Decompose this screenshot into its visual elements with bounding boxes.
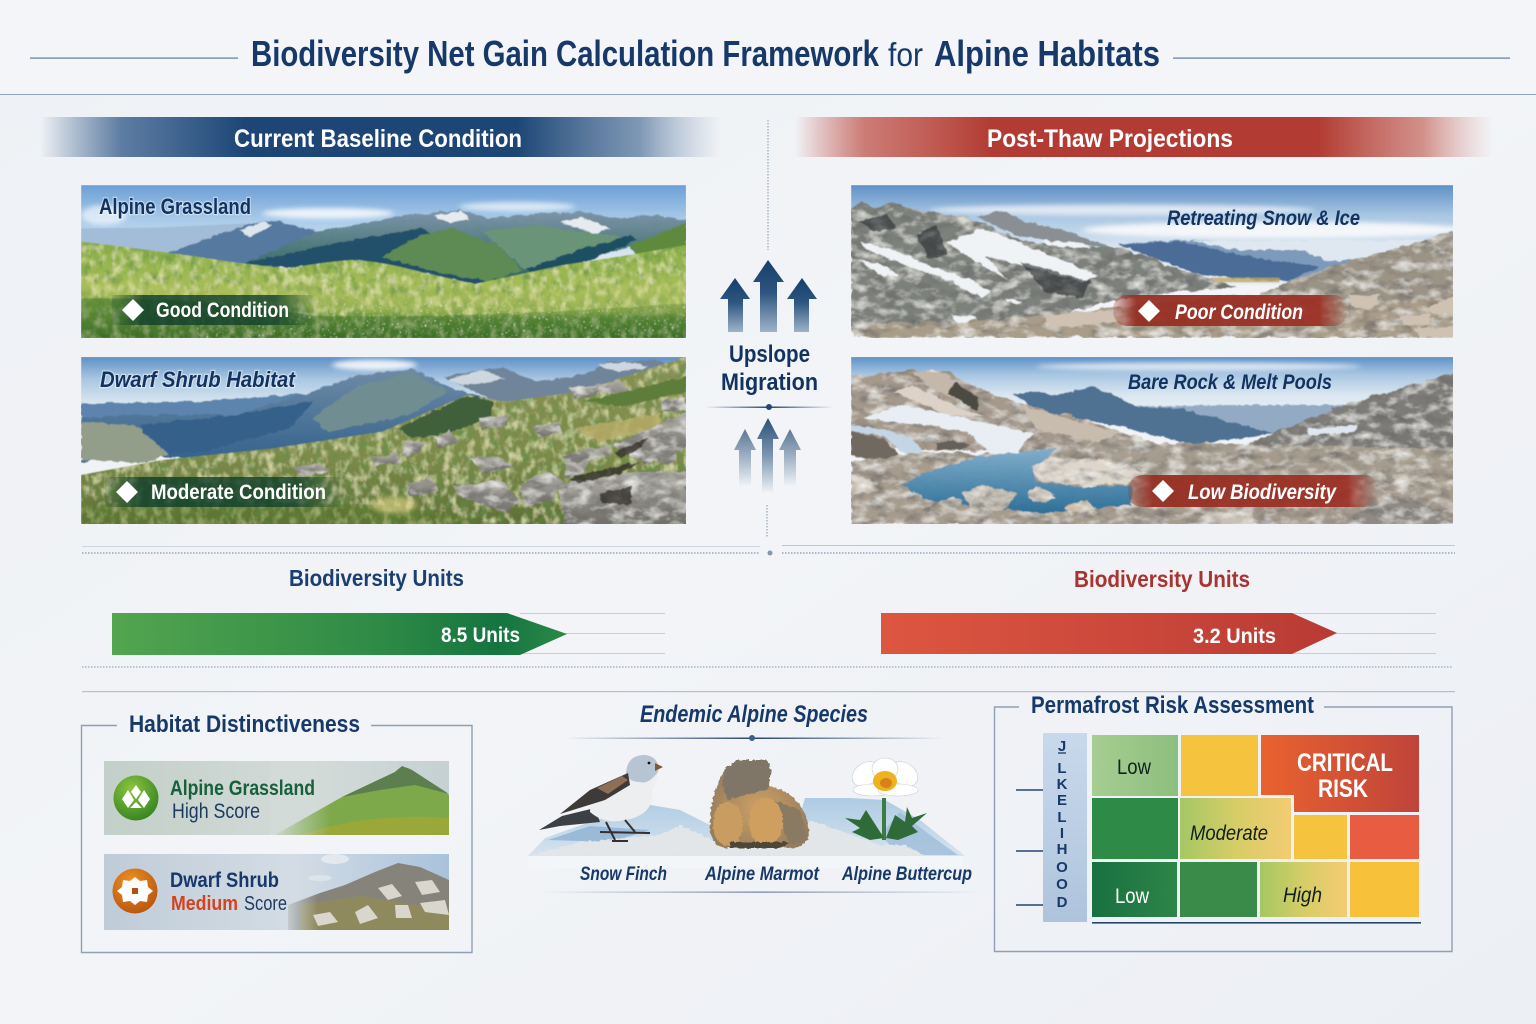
photo panel: alpine grassland <box>81 185 686 338</box>
label: Dwarf Shrub Habitat: Dwarf Shrub Habitat <box>100 367 297 392</box>
title bar <box>0 0 1536 95</box>
axis: likelihood: H <box>1057 841 1067 858</box>
photo panel: bare rock and melt pools <box>851 357 1456 525</box>
axis: likelihood: L <box>1057 760 1067 777</box>
risk matrix: Low <box>1115 885 1150 908</box>
heading: biodiversity units right: Biodiversity Units <box>1074 566 1250 592</box>
title: Biodiversity Net Gain Calculation Framework <box>251 33 880 74</box>
header banner: post-thaw: Post-Thaw Projections <box>987 125 1233 153</box>
illustration: alpine marmot <box>710 760 809 848</box>
axis: likelihood: J <box>1058 738 1066 755</box>
header banner: current baseline <box>40 117 722 157</box>
bar: 3.2 units: 3.2 Units <box>1193 625 1276 648</box>
badge: low biodiversity <box>1128 475 1378 507</box>
axis: likelihood <box>1016 733 1087 922</box>
heading: biodiversity units left: Biodiversity Units <box>289 565 464 591</box>
badge: moderate condition <box>105 477 345 507</box>
label: alpine buttercup: Alpine Buttercup <box>841 864 972 885</box>
risk matrix: High <box>1283 884 1322 907</box>
risk matrix: RISK <box>1318 775 1368 803</box>
risk matrix <box>1092 735 1421 924</box>
label: Upslope Migration: Migration <box>721 369 818 396</box>
icon: lower arrows <box>734 418 801 492</box>
heading: endemic alpine species: Endemic Alpine Species <box>640 701 868 728</box>
bar: 8.5 units: 8.5 Units <box>441 624 520 647</box>
axis: likelihood: L <box>1057 809 1067 826</box>
bar: 3.2 units <box>881 613 1337 654</box>
badge: low biodiversity: Low Biodiversity <box>1188 481 1337 504</box>
badge: poor condition: Poor Condition <box>1175 301 1303 324</box>
axis: likelihood: I <box>1060 825 1064 842</box>
risk matrix: Low <box>1117 756 1152 779</box>
axis: likelihood: O <box>1056 876 1068 893</box>
label: snow finch: Snow Finch <box>580 864 667 885</box>
title words: Alpine Habitats: Alpine Habitats <box>934 33 1160 74</box>
panel: permafrost risk assessment <box>994 692 1452 952</box>
photo panel: dwarf shrub <box>81 357 686 525</box>
label: Bare Rock & Melt Pools: Bare Rock & Melt Pools <box>1128 371 1332 394</box>
header banner: post-thaw <box>795 117 1493 157</box>
card: alpine grassland score: High Score <box>172 800 260 823</box>
title word: for: for <box>888 36 923 73</box>
heading: permafrost risk assessment: Permafrost Risk Assessment <box>1031 692 1314 719</box>
axis: likelihood: D <box>1057 894 1068 911</box>
card: dwarf shrub score: Medium <box>171 893 238 915</box>
card: alpine grassland score: Alpine Grassland <box>170 777 315 800</box>
badge: moderate condition: Moderate Condition <box>151 481 326 504</box>
card: dwarf shrub score <box>104 854 449 930</box>
photo panel: retreating snow <box>851 185 1469 338</box>
axis: likelihood: O <box>1056 859 1068 876</box>
label: Retreating Snow & Ice: Retreating Snow & Ice <box>1167 207 1360 230</box>
card: dwarf shrub score: Score <box>244 893 287 915</box>
axis: likelihood: K <box>1057 776 1068 793</box>
label: alpine marmot: Alpine Marmot <box>704 864 820 885</box>
card: alpine grassland score <box>104 761 449 835</box>
icon: green badge <box>114 776 158 820</box>
label: Upslope Migration: Upslope <box>729 341 810 368</box>
panel: habitat distinctiveness <box>82 711 472 952</box>
panel: endemic alpine species <box>528 701 980 893</box>
axis: likelihood: E <box>1057 792 1067 809</box>
icon: orange badge <box>112 868 158 914</box>
header banner: current baseline: Current Baseline Condition <box>234 125 522 153</box>
illustration: snow finch <box>539 755 663 841</box>
icon: upper arrows <box>720 260 817 332</box>
bar: 8.5 units <box>112 613 567 655</box>
illustration: alpine buttercup <box>845 756 927 840</box>
illustration: snowy ground <box>528 798 965 868</box>
risk matrix: Moderate <box>1190 822 1268 845</box>
upslope migration indicator <box>705 260 833 492</box>
badge: good condition: Good Condition <box>156 299 289 322</box>
badge: good condition <box>112 295 317 325</box>
heading: habitat distinctiveness: Habitat Distinctiveness <box>129 711 360 738</box>
badge: poor condition <box>1113 295 1348 326</box>
risk matrix: CRITICAL <box>1297 749 1393 777</box>
label: Upslope Migration <box>721 341 818 396</box>
card: dwarf shrub score: Dwarf Shrub <box>170 869 279 892</box>
label: Alpine Grassland: Alpine Grassland <box>99 194 251 219</box>
